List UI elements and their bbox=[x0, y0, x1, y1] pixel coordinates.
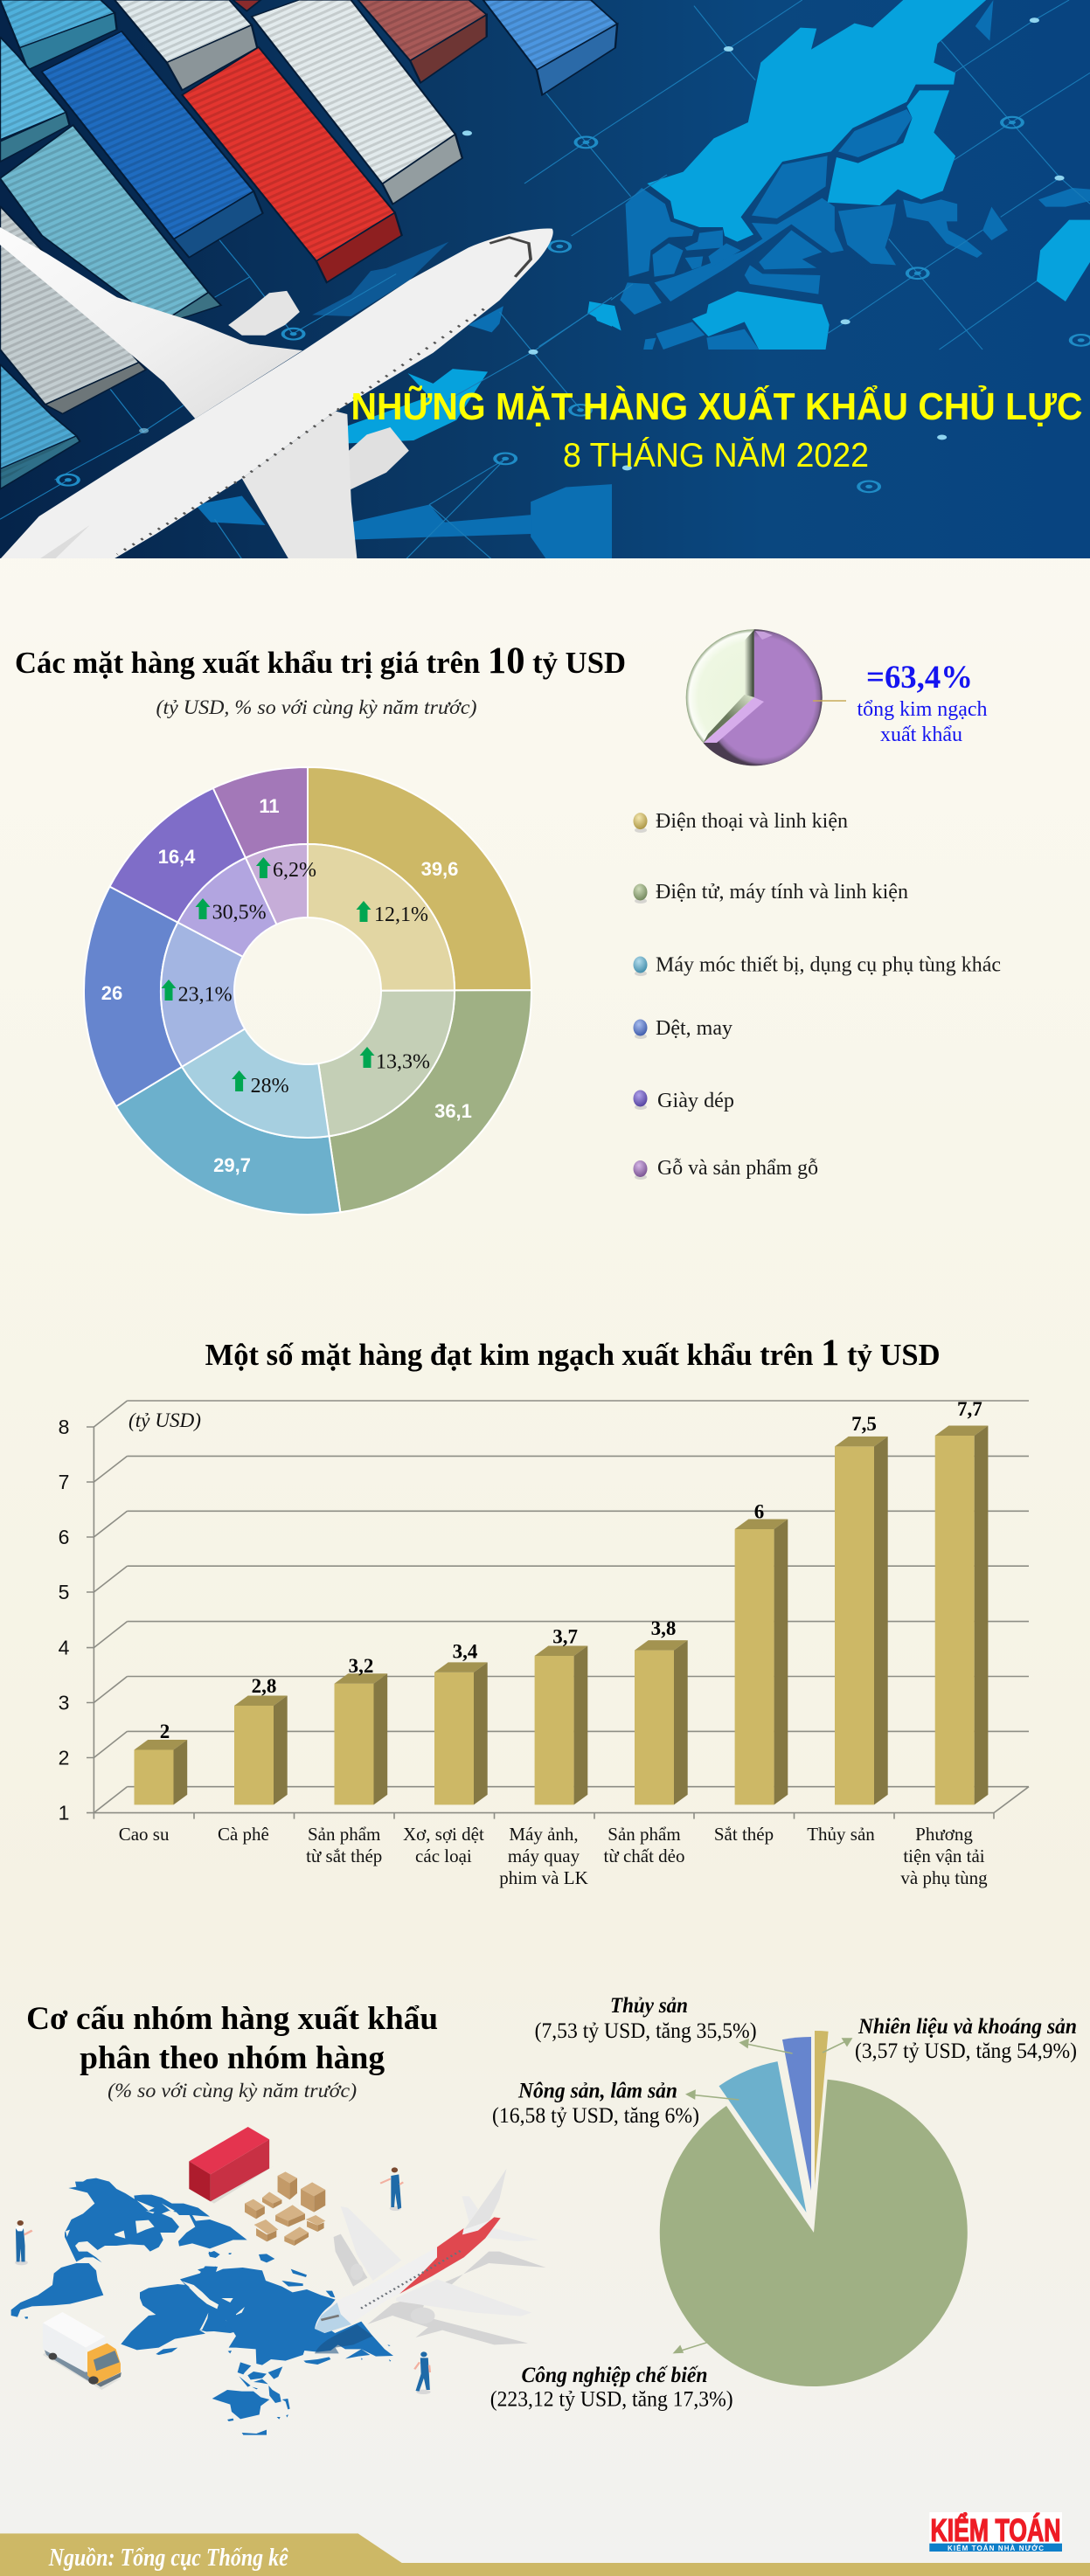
label: fishery: Thủy sản bbox=[610, 1994, 688, 2018]
y axis labels: 4 bbox=[59, 1636, 70, 1658]
donut legend: Giày dép bbox=[657, 1090, 734, 1112]
section note: (% so với cùng kỳ năm trước) bbox=[108, 2080, 357, 2102]
y axis labels: 2 bbox=[59, 1746, 69, 1769]
unit label: (tỷ USD) bbox=[128, 1409, 201, 1431]
callout: 63.4 percent bbox=[857, 660, 988, 746]
green up arrows bbox=[161, 857, 374, 1091]
growth percentages: 28% bbox=[251, 1075, 289, 1098]
section heading: items over 10 billion USD: Các mặt hàng xuất khẩu trị giá trên 10 tỷ USD bbox=[15, 641, 626, 682]
bar value labels: 2 bbox=[160, 1721, 170, 1742]
pie label arrows bbox=[674, 2039, 851, 2352]
label: fishery bbox=[535, 1994, 757, 2043]
donut value labels: 26 bbox=[101, 982, 122, 1004]
donut value labels: 36,1 bbox=[434, 1100, 472, 1122]
x axis category labels: tiện vận tải bbox=[903, 1845, 985, 1866]
x axis category labels: Sắt thép bbox=[714, 1824, 774, 1845]
y axis labels: 8 bbox=[59, 1416, 69, 1438]
bar value labels bbox=[160, 1398, 982, 1742]
donut legend: Máy móc thiết bị, dụng cụ phụ tùng khác bbox=[656, 954, 1001, 977]
cargo plane bbox=[315, 2169, 545, 2353]
small pie: share of total export value bbox=[686, 629, 846, 765]
bar value labels: 7,7 bbox=[957, 1398, 982, 1420]
bar value labels: 3,4 bbox=[453, 1641, 478, 1662]
label: agriculture and forestry: Nông sản, lâm sản bbox=[517, 2080, 677, 2102]
delivery truck bbox=[43, 2312, 121, 2390]
donut legend: Gỗ và sản phẩm gỗ bbox=[657, 1157, 818, 1180]
growth percentages: 23,1% bbox=[178, 984, 233, 1007]
label: fishery: (7,53 tỷ USD, tăng 35,5%) bbox=[535, 2019, 757, 2043]
callout: 63.4 percent: tổng kim ngạch bbox=[857, 698, 988, 721]
donut value labels: 29,7 bbox=[213, 1154, 251, 1176]
bar value labels: 2,8 bbox=[252, 1675, 276, 1697]
x axis category labels: từ sắt thép bbox=[306, 1845, 382, 1866]
section heading: export structure by group: Cơ cấu nhóm hàng xuất khẩu bbox=[26, 2001, 438, 2037]
donut legend: Điện tử, máy tính và linh kiện bbox=[656, 881, 908, 904]
cargo boxes bbox=[245, 2171, 325, 2246]
label: processing industry: (223,12 tỷ USD, tăng 17,3%) bbox=[490, 2387, 733, 2412]
illustration: world map, cargo, plane, truck and workers bbox=[11, 2127, 545, 2435]
subtitle: 8 THÁNG NĂM 2022 bbox=[563, 437, 869, 474]
bar value labels: 3,2 bbox=[349, 1655, 373, 1677]
x axis category labels: Sản phẩm bbox=[308, 1824, 380, 1845]
bar value labels: 7,5 bbox=[851, 1413, 877, 1435]
section heading: export structure by group bbox=[26, 2001, 438, 2076]
y axis labels: 7 bbox=[59, 1471, 69, 1493]
donut legend: Dệt, may bbox=[656, 1017, 732, 1040]
worker right bbox=[414, 2351, 431, 2394]
label: agriculture and forestry bbox=[492, 2080, 699, 2128]
section heading: items over 1 billion USD: Một số mặt hàng đạt kim ngạch xuất khẩu trên 1 tỷ USD bbox=[205, 1333, 941, 1374]
donut value labels bbox=[101, 795, 472, 1176]
callout: 63.4 percent: =63,4% bbox=[866, 660, 973, 696]
x axis category labels: Máy ảnh, bbox=[509, 1824, 579, 1845]
donut value labels: 39,6 bbox=[421, 858, 458, 880]
bar value labels: 3,8 bbox=[651, 1617, 676, 1639]
outer ring: export values bbox=[84, 767, 531, 1215]
x axis category labels: phim và LK bbox=[499, 1867, 588, 1888]
x axis category labels: Thủy sản bbox=[807, 1824, 875, 1845]
section heading: export structure by group: phân theo nhóm hàng bbox=[80, 2040, 385, 2076]
exploded pie chart: export groups bbox=[660, 2031, 968, 2386]
y axis labels bbox=[59, 1416, 70, 1825]
label: processing industry bbox=[490, 2364, 733, 2412]
bars bbox=[135, 1426, 988, 1804]
footer band bbox=[0, 2533, 1090, 2576]
label: fuel and minerals: Nhiên liệu và khoáng sản bbox=[857, 2015, 1077, 2039]
inner ring: growth rates bbox=[161, 844, 455, 1138]
donut legend: Điện thoại và linh kiện bbox=[656, 810, 848, 833]
x axis category labels: Cà phê bbox=[218, 1824, 269, 1845]
header illustration: containers, plane and world map bbox=[0, 0, 1090, 559]
source note: Nguồn: Tổng cục Thống kê bbox=[48, 2545, 288, 2572]
growth percentages bbox=[178, 859, 430, 1098]
x axis category labels: các loại bbox=[415, 1845, 472, 1866]
growth percentages: 6,2% bbox=[273, 859, 316, 882]
worker top bbox=[380, 2167, 403, 2211]
worker left bbox=[15, 2220, 32, 2265]
growth percentages: 13,3% bbox=[376, 1050, 430, 1073]
y axis labels: 5 bbox=[59, 1581, 69, 1603]
x axis category labels: Cao su bbox=[119, 1824, 170, 1845]
airplane bbox=[0, 227, 553, 559]
growth percentages: 30,5% bbox=[212, 902, 267, 924]
red container bbox=[189, 2127, 275, 2204]
x axis category labels: và phụ tùng bbox=[900, 1867, 988, 1888]
label: fuel and minerals: (3,57 tỷ USD, tăng 54,9%) bbox=[855, 2039, 1077, 2063]
x axis category labels: Phương bbox=[915, 1824, 973, 1845]
donut value labels: 16,4 bbox=[158, 846, 196, 868]
label: agriculture and forestry: (16,58 tỷ USD, tăng 6%) bbox=[492, 2104, 699, 2128]
x axis category labels: máy quay bbox=[508, 1845, 580, 1866]
section note: (tỷ USD, % so với cùng kỳ năm trước) bbox=[156, 696, 477, 718]
x axis category labels: Sản phẩm bbox=[607, 1824, 681, 1845]
growth percentages: 12,1% bbox=[374, 904, 428, 926]
logo: Kiểm Toán: KIỂM TOÁN NHÀ NƯỚC bbox=[948, 2545, 1044, 2552]
donut legend bbox=[633, 810, 1001, 1180]
x axis category labels bbox=[119, 1824, 988, 1888]
x axis category labels: Xơ, sợi dệt bbox=[403, 1824, 484, 1845]
donut value labels: 11 bbox=[259, 795, 280, 817]
callout: 63.4 percent: xuất khẩu bbox=[880, 724, 962, 746]
donut chart bbox=[84, 767, 531, 1215]
label: processing industry: Công nghiệp chế biến bbox=[521, 2364, 708, 2387]
label: fuel and minerals bbox=[855, 2015, 1077, 2063]
bar value labels: 6 bbox=[754, 1501, 764, 1522]
world map: Eurasia, Oceania bbox=[180, 2252, 393, 2435]
y axis labels: 1 bbox=[59, 1802, 69, 1825]
y axis labels: 3 bbox=[59, 1692, 69, 1714]
header banner bbox=[0, 0, 1090, 559]
x axis category labels: từ chất dẻo bbox=[603, 1845, 685, 1866]
y axis labels: 6 bbox=[59, 1526, 69, 1548]
container stack bbox=[0, 0, 617, 489]
bar value labels: 3,7 bbox=[552, 1625, 578, 1648]
3D bar chart bbox=[59, 1398, 1029, 1888]
world map: Americas, Africa bbox=[11, 2178, 247, 2355]
